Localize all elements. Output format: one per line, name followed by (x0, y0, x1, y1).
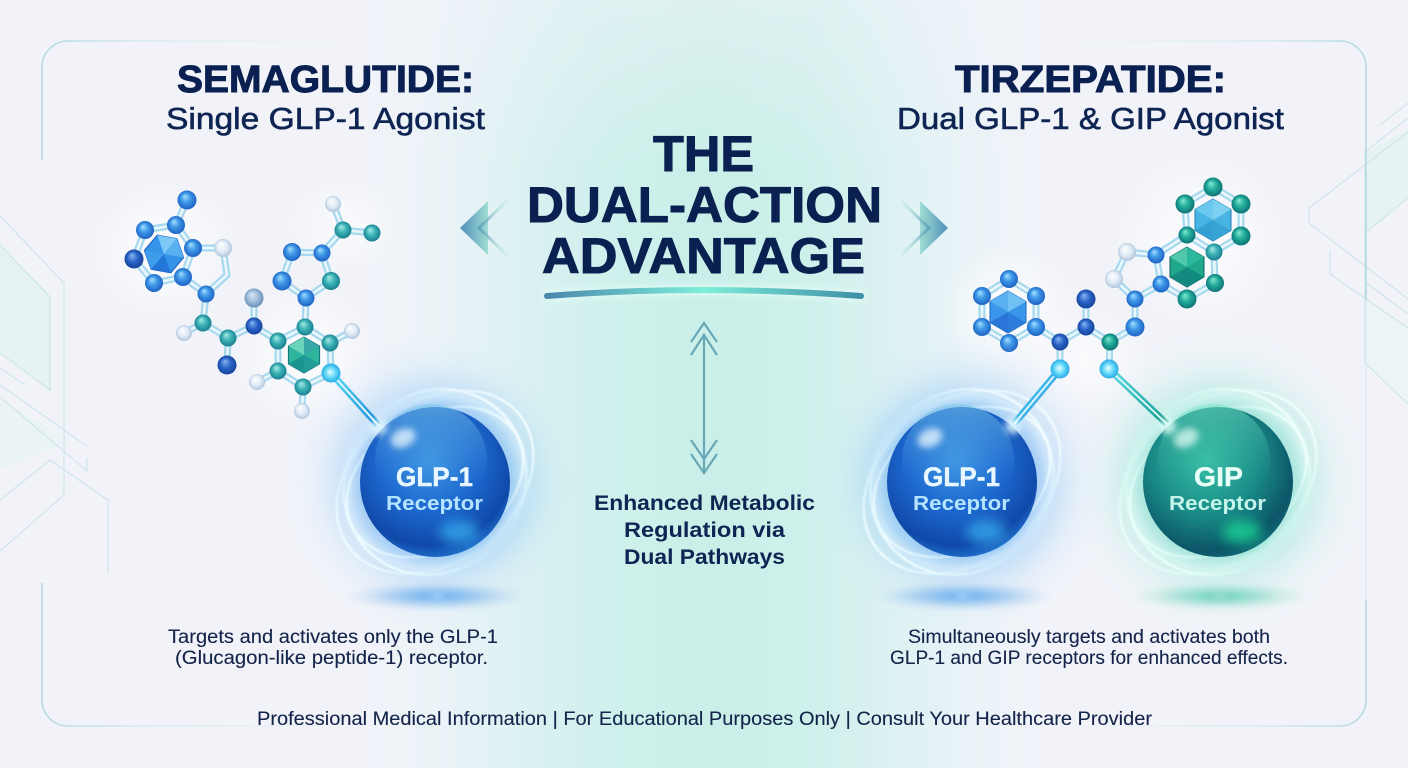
center caption: Enhanced Metabolic (594, 492, 815, 515)
footer disclaimer: Professional Medical Information | For Educational Purposes Only | Consult Your Healthcare Provider (257, 709, 1153, 730)
crystal: blue (144, 235, 184, 273)
heading: semaglutide (166, 59, 485, 136)
arrow: right chevrons (901, 201, 948, 255)
center divider bottom (703, 590, 705, 670)
ball (887, 407, 1037, 557)
crystal: green (288, 337, 320, 373)
shadow under GLP-1 right (871, 581, 1055, 611)
connector: tirzepatide to GIP (1100, 360, 1176, 434)
description: tirzepatide: GLP-1 and GIP receptors for enhanced effects. (890, 648, 1288, 669)
title: THE (653, 126, 754, 182)
description: tirzepatide (890, 627, 1288, 669)
right background tech lines (1309, 103, 1408, 404)
arrow: vertical double-headed (691, 323, 717, 473)
label: Receptor (1169, 493, 1266, 515)
description: semaglutide: Targets and activates only the GLP-1 (168, 627, 498, 648)
description: tirzepatide: Simultaneously targets and activates both (908, 627, 1270, 648)
crystal: blue (990, 291, 1026, 333)
shadow under GIP (1128, 581, 1312, 611)
shadow under GLP-1 left (345, 581, 529, 611)
ball (360, 407, 510, 557)
receptor sphere: GIP (1068, 332, 1368, 632)
connector: semaglutide to GLP-1 (322, 364, 387, 435)
crystal: cyan (1195, 199, 1231, 241)
bonds (982, 187, 1241, 369)
atoms (124, 190, 380, 419)
heading: semaglutide: SEMAGLUTIDE: (177, 59, 474, 101)
left background tech lines (0, 216, 108, 573)
title: DUAL-ACTION (527, 177, 882, 233)
crystal: green (1170, 247, 1204, 287)
molecule: tirzepatide (939, 150, 1285, 415)
receptor sphere: GLP-1 (semaglutide) (285, 332, 585, 632)
molecule: semaglutide (90, 177, 405, 427)
label: GLP-1 (396, 462, 473, 492)
heading: tirzepatide: TIRZEPATIDE: (955, 59, 1226, 101)
heading: semaglutide: Single GLP-1 Agonist (166, 101, 485, 136)
atoms (973, 178, 1250, 352)
ball (1143, 407, 1293, 557)
label (1169, 462, 1266, 515)
title: ADVANTAGE (542, 228, 865, 284)
bonds (134, 200, 372, 411)
description: semaglutide: (Glucagon-like peptide-1) receptor. (175, 648, 488, 669)
receptor sphere: GLP-1 (tirzepatide) (812, 332, 1112, 632)
title (527, 126, 882, 284)
label: GLP-1 (923, 462, 1000, 492)
label (913, 462, 1010, 515)
title underline (547, 290, 861, 296)
arrow: left chevrons (460, 201, 507, 255)
heading: tirzepatide (897, 59, 1284, 136)
center caption (594, 492, 815, 569)
label: Receptor (386, 493, 483, 515)
label: Receptor (913, 493, 1010, 515)
heading: tirzepatide: Dual GLP-1 & GIP Agonist (897, 101, 1284, 136)
center divider top (703, 41, 705, 110)
connector: tirzepatide to GLP-1 (1005, 360, 1070, 434)
center caption: Regulation via (624, 519, 785, 542)
label (386, 462, 483, 515)
description: semaglutide (168, 627, 498, 669)
label: GIP (1194, 462, 1243, 492)
center caption: Dual Pathways (624, 546, 785, 569)
